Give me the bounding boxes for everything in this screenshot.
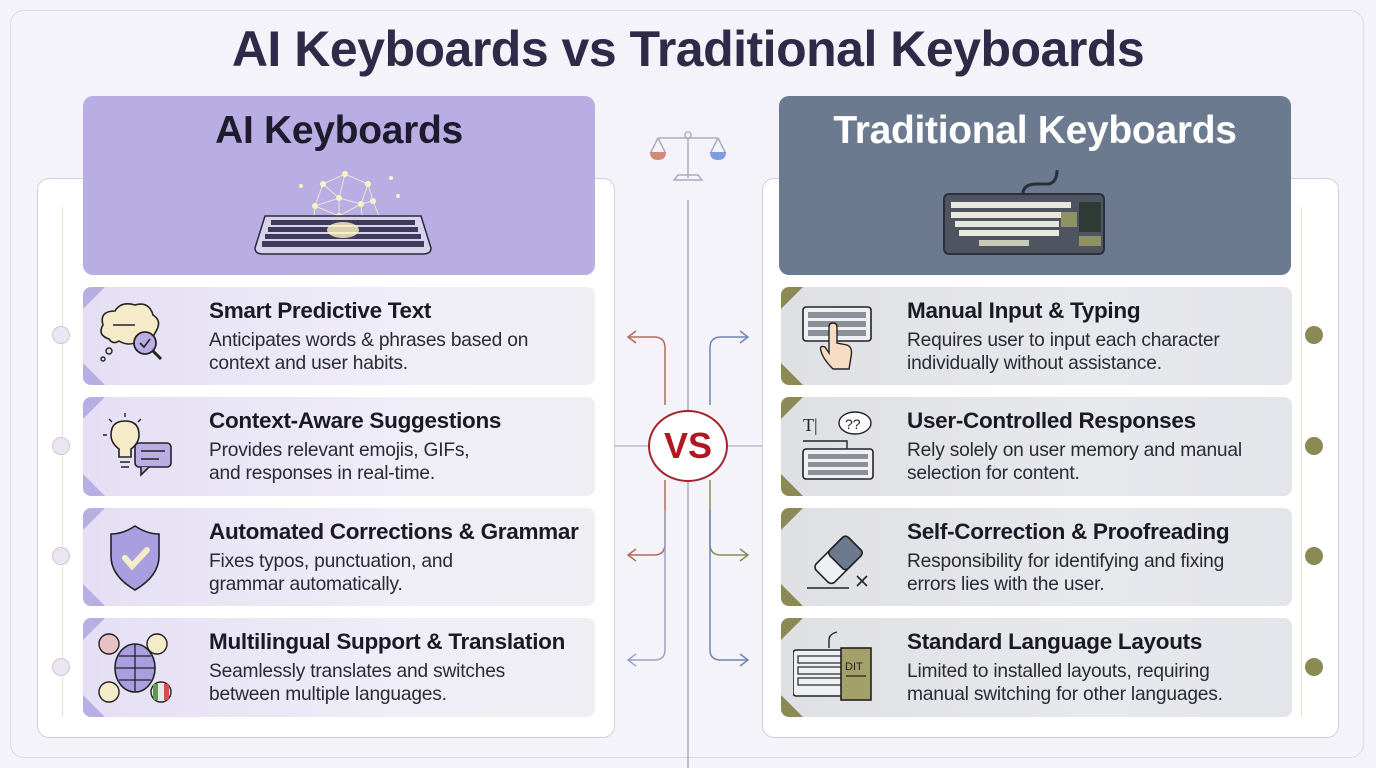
icon: mechanical keyboard [943, 170, 1105, 255]
icon: shield check [110, 525, 160, 591]
row: User-Controlled [781, 397, 1292, 496]
icon: globe with chats and flags [98, 633, 172, 703]
row: User-Controlled: selection for content. [907, 463, 1080, 484]
icon: keyboard with question cloud: T| [803, 415, 818, 435]
icon: AI keyboard with network [254, 171, 432, 255]
row: Context-Aware Suggestions: Context-Aware Suggestions [209, 408, 501, 433]
VS badge [648, 410, 728, 482]
row: Manual Input [781, 287, 1292, 385]
dot markers right [1305, 326, 1323, 676]
panel: AI keyboards card [37, 178, 615, 738]
row: Context-Aware Suggestions [83, 397, 595, 496]
row: Smart Predictive Text [83, 287, 595, 385]
icon: keyboard with question cloud: ?? [845, 416, 861, 432]
title: AI Keyboards vs Traditional Keyboards [232, 21, 1144, 77]
panel: AI keyboards header [83, 96, 595, 275]
row: Smart Predictive Text: context and user habits. [209, 353, 408, 374]
icon: keyboard with dictionary [793, 631, 872, 701]
panel: traditional keyboards header: Traditional Keyboards [833, 109, 1237, 152]
row: Standard Language Layouts: Standard Language Layouts [907, 629, 1202, 654]
VS badge: VS [664, 425, 712, 466]
row: Manual Input: Manual Input & Typing [907, 298, 1140, 323]
row: User-Controlled: User-Controlled Responses [907, 408, 1196, 433]
row: Manual Input: Requires user to input each character [907, 330, 1220, 351]
row: Multilingual Support [83, 618, 595, 717]
row: Multilingual Support: Multilingual Support & Translation [209, 629, 565, 654]
row: Context-Aware Suggestions: and responses in real-time. [209, 463, 435, 484]
row: Automated Corrections: Fixes typos, punctuation, and [209, 551, 453, 572]
arrows: connectors [614, 200, 762, 768]
panel: AI keyboards header: AI Keyboards [215, 109, 463, 152]
row: Context-Aware Suggestions: Provides relevant emojis, GIFs, [209, 440, 469, 461]
row: Automated Corrections: grammar automatically. [209, 574, 403, 595]
row: Standard Language Layouts [781, 618, 1292, 717]
icon: keyboard with question cloud [802, 411, 874, 480]
row: Automated Corrections [83, 508, 595, 606]
icon: balance scale [650, 131, 726, 181]
row: Self-Correction: errors lies with the user. [907, 574, 1104, 595]
row: Standard Language Layouts: manual switching for other languages. [907, 684, 1223, 705]
row: User-Controlled: Rely solely on user memory and manual [907, 440, 1242, 461]
row: Multilingual Support: between multiple languages. [209, 684, 447, 705]
icon: keyboard with dictionary: DIT [845, 661, 863, 673]
row: Multilingual Support: Seamlessly translates and switches [209, 661, 505, 682]
panel: traditional keyboards header [779, 96, 1291, 275]
row: Smart Predictive Text: Anticipates words & phrases based on [209, 330, 528, 351]
row: Manual Input: individually without assistance. [907, 353, 1162, 374]
icon: keyboard with hand [802, 306, 872, 370]
panel: traditional keyboards card [762, 178, 1339, 738]
row: Automated Corrections: Automated Corrections & Grammar [209, 519, 579, 544]
icon: thought cloud with magnifier [100, 303, 162, 362]
icon: eraser [807, 535, 868, 589]
row: Self-Correction: Self-Correction & Proofreading [907, 519, 1229, 544]
row: Standard Language Layouts: Limited to installed layouts, requiring [907, 661, 1210, 682]
row: Self-Correction [781, 508, 1292, 606]
dot markers left [52, 326, 70, 676]
icon: lightbulb with chat [103, 413, 172, 477]
row: Smart Predictive Text: Smart Predictive Text [209, 298, 431, 323]
row: Self-Correction: Responsibility for identifying and fixing [907, 551, 1224, 572]
